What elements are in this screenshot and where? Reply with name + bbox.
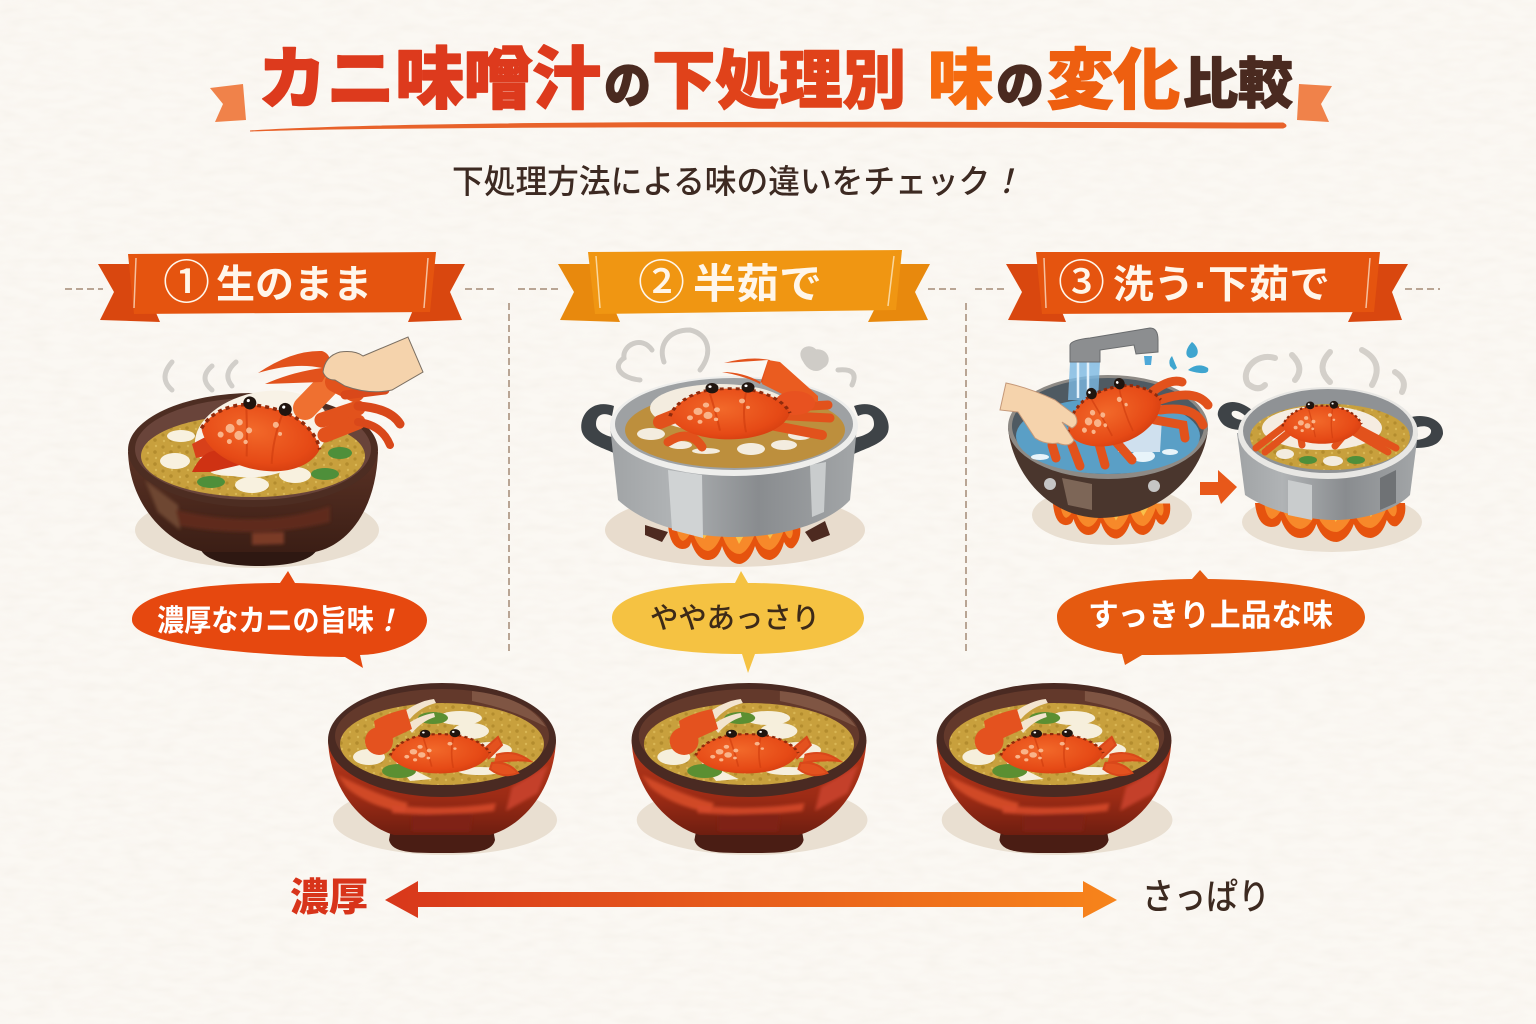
illustration: steel pot with crab <box>581 359 889 567</box>
water drops <box>1169 342 1208 373</box>
taste scale <box>290 876 1270 920</box>
crab 2 <box>660 359 830 447</box>
result bowl 2 <box>632 683 867 855</box>
arrow between steps <box>1200 470 1237 504</box>
banner 3: ③ <box>1058 256 1105 309</box>
result bowl 1 <box>328 683 557 855</box>
title text: 比較 <box>1183 53 1293 115</box>
bubble 3: すっきり上品な味 <box>1088 598 1333 633</box>
claw and legs 1 <box>305 380 400 445</box>
title text: の <box>604 58 651 114</box>
illustration: washing pan <box>1000 328 1208 545</box>
faucet <box>1070 328 1158 362</box>
title <box>210 42 1332 131</box>
title text: 味 <box>928 43 993 117</box>
title text: 下処理別 <box>652 45 906 117</box>
label: light: さっぱり <box>1142 876 1270 917</box>
banner 1: ① <box>163 256 210 309</box>
bubble 2: ややあっさり <box>650 603 820 635</box>
banner 3: 洗う·下茹で <box>1113 264 1330 307</box>
bubble 1 <box>132 571 427 668</box>
crab 3a <box>1052 368 1208 466</box>
banner 2: ② <box>638 256 685 309</box>
banner 2 <box>558 250 930 322</box>
title text <box>258 42 1293 118</box>
scale arrow <box>385 881 1117 918</box>
title flag: left <box>210 84 246 122</box>
result bowl 3 <box>937 683 1172 855</box>
hand 3a <box>1000 383 1077 445</box>
title text: 変化 <box>1047 43 1180 117</box>
illustration: steel pot 3 <box>1218 387 1443 552</box>
title flag: right <box>1297 84 1332 122</box>
illustration: brown bowl with crab and hand <box>128 337 423 568</box>
banner 3 <box>1006 252 1408 322</box>
title underline <box>250 122 1286 131</box>
bubble 2 <box>612 571 864 673</box>
subtitle: 下処理方法による味の違いをチェック！ <box>452 163 1022 200</box>
steam 2 <box>618 330 854 385</box>
panel: 2 parboil <box>558 250 930 673</box>
banner 2: 半茹で <box>693 261 822 307</box>
title text: カニ味噌汁 <box>258 42 601 118</box>
hand 1 <box>323 337 423 392</box>
panel: 1 raw <box>98 252 465 668</box>
banner 1 <box>98 252 465 322</box>
bubble 3 <box>1057 570 1365 665</box>
bubble 1: 濃厚なカニの旨味！ <box>157 605 401 638</box>
dividers <box>65 289 1440 655</box>
panel: 3 wash and parboil <box>1000 252 1443 665</box>
label: rich: 濃厚 <box>290 877 368 920</box>
crab 3b <box>1256 401 1396 452</box>
steam 3 <box>1246 350 1404 392</box>
title text: の <box>996 58 1044 114</box>
steam 1 <box>165 362 236 390</box>
banner 1: 生のまま <box>216 264 372 307</box>
